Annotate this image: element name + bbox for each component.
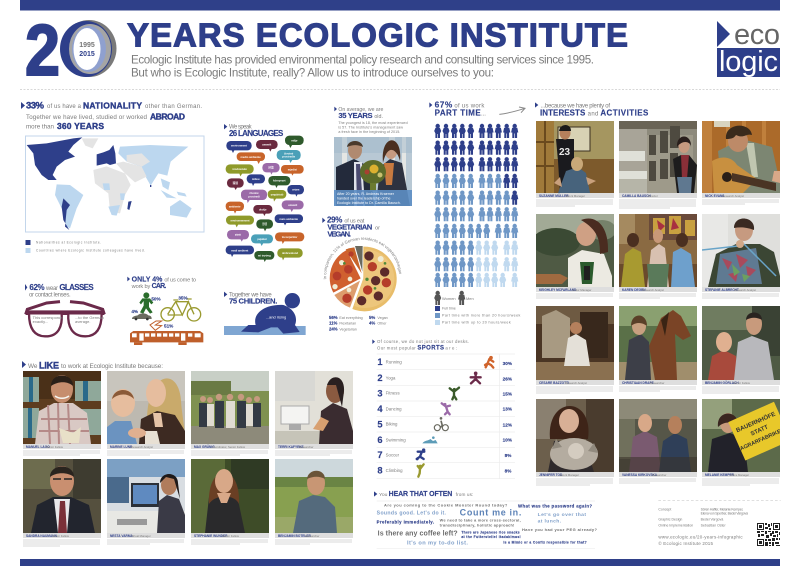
panel: sports ranking: SPORTS [417, 346, 444, 352]
panel: sports ranking: 8% [505, 453, 512, 458]
photo card: Benjamin Görlach: BENJAMIN GÖRLACH [705, 380, 739, 385]
photo card: Sandra: Senior Fellow [52, 534, 70, 538]
panel: 26 languages speech bubbles: pejabat [257, 237, 267, 241]
panel: sports ranking: Of course, we do not just sit at our desks. [377, 339, 469, 344]
photo card: row three middle, horse: CHRISTIAAN DRAPE [622, 381, 654, 385]
photo card: Camilla Bausch: Director [648, 194, 658, 198]
pictogram legend [434, 291, 521, 325]
panel: quotes we hear often: Preferably immediately. [377, 520, 434, 525]
panel: sports ranking: 8% [505, 469, 512, 474]
pizza chart: In comparison, 11% of German residents eat vegetarian/vegan. [324, 237, 402, 280]
icon: yoga [471, 375, 481, 383]
panel: credits: Elena von Sperber, Bedei Vargová [701, 511, 748, 515]
panel: average age: On average, we are [338, 107, 383, 113]
pictogram legend: Part time with up to 20 hours/week [442, 321, 511, 325]
panel heading: interests and activities: ACTIVITIES [600, 108, 649, 117]
panel: credits: Sebastian Oster [701, 524, 726, 528]
panel: nationality and abroad: more than [26, 124, 55, 130]
panel: 26 languages speech bubbles: medio ambiente [241, 155, 261, 159]
panel: credits: Online Implementation [658, 524, 693, 528]
photo card: family pair [619, 399, 697, 483]
photo: handover with flowers: handed over the leadership of the [337, 196, 391, 200]
pizza legend: Vegetarian [339, 327, 357, 331]
panel: credits: © Ecologic Institute 2015 [658, 540, 713, 546]
icon: dancing [442, 403, 450, 414]
pizza legend: 11% [329, 321, 338, 326]
panel: 26 languages speech bubbles: umwelt [288, 203, 297, 207]
photo card: Karen Degen [619, 214, 697, 298]
pizza legend [329, 315, 388, 331]
photo card: Karen Degen: KAREN DEGEN [622, 288, 646, 292]
photo card: row three left [536, 306, 614, 393]
panel: part time [429, 100, 525, 118]
anniversary logo: 20 with 1995-2015: 1995 [79, 42, 95, 49]
panel: 26 languages speech bubbles: 环境 [268, 166, 274, 170]
photo card: Melanie with protest sign: STATT [750, 425, 770, 438]
panel: 75 children: ...and rising [266, 315, 286, 320]
photo card: Camilla Bausch: CAMILLA BAUSCH [622, 194, 651, 198]
pictogram legend: Part time with more than 20 hours/week [442, 314, 521, 318]
photo card: Stefanie Albrecht [702, 214, 780, 298]
photo card: Stefanie Albrecht: Research Analyst [734, 288, 756, 292]
panel: nationality and abroad: 360 YEARS [57, 121, 104, 131]
icon: swimming [422, 439, 438, 443]
photo card: Stefanie Albrecht: STEFANIE ALBRECHT [705, 288, 739, 292]
panel: commute to work: CAR. [152, 283, 166, 290]
ecologic logo: logic [719, 46, 778, 78]
panel: average age: The youngest is 18, the most experienced [338, 121, 408, 125]
panel: commute to work: 4% [131, 309, 139, 314]
title: YEARS ECOLOGIC INSTITUTE [127, 16, 628, 54]
photo card: Benjamin Boteler [275, 459, 353, 544]
panel: commute to work [127, 276, 203, 345]
photo card: Marine [107, 371, 185, 455]
pizza legend: 24% [329, 326, 338, 331]
photo card: Stephanie Wunder: Senior Fellow [222, 534, 240, 538]
icon: fitness [450, 388, 459, 399]
pizza legend: Other [377, 322, 387, 326]
panel: 26 languages speech bubbles: ಪರಿಸರ [235, 234, 242, 237]
photo card: woman with cat: JENNIFER TOD [539, 473, 563, 477]
panel: sports ranking: Our most popular [377, 346, 416, 351]
photo card: Benjamin Boteler: Researcher [305, 534, 320, 538]
photo card: Stephanie Wunder [191, 459, 269, 544]
panel: average age: is 57. The Institute's management saw [338, 125, 403, 129]
photo card: Keighley McFarland [532, 214, 616, 298]
panel: 26 languages speech bubbles: milieu [252, 177, 260, 181]
panel: quotes we hear often: Let's go over that [538, 512, 586, 518]
bottom banner [20, 559, 780, 566]
photo card: Suzanne Müller [536, 121, 614, 206]
icon: running [485, 359, 493, 368]
panel: credits: Concept [658, 508, 671, 512]
photo card: Manuel Lago: Senior Fellow [46, 445, 64, 449]
photo card: family pair: VANESSA KIRKOVSKA [622, 473, 658, 477]
photo card: Nick Evans: NICK EVANS [705, 194, 724, 198]
icon: pedestrian [139, 292, 153, 314]
photo card: Max: MAX GRÜNIG [194, 444, 215, 449]
icon: climbing [418, 464, 424, 477]
panel: sports ranking: 15% [503, 392, 513, 397]
panel: sports ranking: 7 [377, 450, 383, 460]
panel: sports ranking: Climbing [386, 468, 403, 473]
panel heading: interests and activities: and [588, 111, 598, 117]
pizza legend: 56% [329, 315, 338, 320]
photo: handover with flowers: Ecologic Institute to Dr. Camilla Bausch. [337, 201, 401, 205]
photo card: family pair: Researcher [652, 473, 667, 477]
ecologic logo: eco [734, 19, 780, 51]
world map [26, 136, 204, 232]
panel: 26 languages speech bubbles: environnement [230, 218, 250, 222]
intro text: But who is Ecologic Institute, really? Allow us to introduce ourselves to you: [131, 66, 494, 80]
panel heading: interests and activities [535, 102, 649, 117]
panel: sports ranking: 30% [503, 361, 513, 366]
panel: quotes we hear often: transdisciplinary, holistic approach! [440, 524, 514, 528]
panel: commute to work: 50% [151, 296, 162, 301]
photo card: Suzanne Müller: SUZANNE MÜLLER [539, 193, 569, 198]
photo card: Marine: MARINE LUNE [110, 445, 132, 449]
panel: sports ranking: 1 [377, 357, 383, 367]
photo card: Suzanne Müller: 23 [559, 147, 571, 158]
panel: quotes we hear often: You [379, 492, 388, 498]
photo card: row three left: Research Analyst [565, 381, 587, 385]
panel: 75 children: 75 CHILDREN. [229, 296, 277, 305]
panel: part time: of us work [454, 103, 484, 109]
panel: glasses: or contact lenses. [29, 293, 71, 299]
panel: 26 languages speech bubbles: ympäristö [271, 192, 284, 196]
map legend: Countries where Ecologic Institute colleagues have lived. [36, 248, 145, 252]
photo card: Terri: Researcher [299, 445, 314, 449]
intro text: Ecologic Institute has provided environmental policy research and consulting services since 1995. [131, 54, 594, 66]
panel: glasses: GLASSES [59, 283, 94, 292]
panel: part time: ... [481, 112, 486, 118]
photo card: Sandra: SANDRA NAUMANN [26, 534, 58, 538]
panel: nationality and abroad: Together we have lived, studied or worked [26, 114, 148, 121]
photo card: Marine: Research Analyst [131, 445, 153, 449]
photo card: Nick Evans: Research Analyst [722, 194, 744, 198]
panel: quotes we hear often: There are Japanese rice snacks [461, 530, 520, 534]
photo card: woman with cat: Event Manager [560, 473, 579, 477]
panel: 26 languages speech bubbles: 26 LANGUAGES [229, 129, 284, 138]
photo card: Max: Coordinator, Senior Fellow [212, 445, 246, 449]
panel: 26 languages speech bubbles [224, 124, 304, 262]
panel: sports ranking: 4 [377, 404, 383, 414]
panel: commute to work: 51% [164, 324, 174, 329]
ecologic logo [717, 19, 780, 78]
photo card: row three left: CESARE BAZZOTTI [539, 381, 569, 385]
photo card: Melanie with protest sign [702, 399, 791, 485]
panel: 26 languages speech bubbles: We speak [229, 125, 252, 131]
panel: commute to work: work by [131, 284, 151, 290]
icon: soccer [417, 452, 424, 459]
panel: sports ranking: 12% [503, 423, 513, 428]
panel: 26 languages speech bubbles: ortam [292, 188, 300, 192]
panel: sports ranking: Yoga [386, 375, 396, 380]
pizza chart [324, 237, 402, 312]
panel: 26 languages speech bubbles: umwelt [262, 143, 271, 147]
panel: 26 languages speech bubbles: mi trường [258, 254, 271, 258]
panel: nationality and abroad: other than German. [145, 104, 202, 110]
panel: 26 languages speech bubbles: životné [249, 191, 259, 195]
photo card: Camilla Bausch [619, 121, 697, 208]
panel: quotes we hear often: HEAR THAT OFTEN [389, 491, 452, 498]
panel: vegetarian or vegan [322, 216, 380, 239]
panel: part time: PART TIME [435, 109, 481, 118]
panel: vegetarian or vegan: or [375, 225, 380, 231]
panel: sports ranking: Dancing [386, 406, 402, 411]
photo card: Sandra [23, 459, 101, 546]
pictogram legend: Men [466, 296, 474, 301]
photo card: Karen Degen: Research Analyst [642, 288, 664, 292]
panel: sports ranking: Fitness [386, 391, 400, 396]
panel: 26 languages speech bubbles: meio ambiente [279, 217, 298, 221]
panel heading: interests and activities: ...because we have plenty of [541, 103, 610, 109]
panel: glasses: This corresponds [33, 315, 63, 320]
panel: quotes we hear often: Sounds good. Let's do it. [377, 511, 447, 517]
icon: biking [434, 425, 448, 431]
panel: commute to work: 35% [178, 295, 189, 300]
panel: glasses: 62% [29, 283, 45, 292]
panel: sports ranking: 13% [503, 407, 513, 412]
panel: 26 languages speech bubbles: ambiente [229, 204, 241, 208]
panel: quotes we hear often: Is a Mimic or a Confix responsible for that? [503, 541, 587, 545]
photo card: Max [191, 371, 269, 455]
panel: vegetarian or vegan: of us eat [344, 219, 365, 225]
panel: quotes we hear often: from us: [456, 492, 473, 497]
panel: nationality and abroad: of us have a [47, 104, 82, 110]
photo card: Nesta [107, 459, 185, 544]
panel: sports ranking: 5 [377, 419, 383, 429]
photo card: row three middle, horse [619, 306, 697, 391]
photo card: Suzanne Müller: Event Manager [566, 194, 585, 198]
panel: glasses: ...to the German [75, 315, 104, 320]
panel: sports ranking: Running [386, 359, 402, 364]
photo card: Stephanie Wunder: STEPHANIE WUNDER [194, 534, 228, 538]
pizza legend: 4% [369, 321, 375, 326]
panel: quotes we hear often: We need to take a more cross-sectoral, [440, 519, 521, 523]
pictogram chart: staff by hours [434, 124, 518, 287]
panel: sports ranking: Soccer [386, 452, 400, 457]
panel: average age: a fresh face in the beginning of 2015. [338, 130, 400, 134]
panel: sports ranking: 2 [377, 373, 383, 383]
panel: glasses: exactly... [33, 319, 48, 324]
panel: 26 languages speech bubbles: înconjurător [281, 235, 297, 239]
photo: handover with flowers: After 20 years, R. Andreas Kraemer [337, 192, 395, 196]
panel: credits: Graphic Design [658, 518, 682, 522]
panel: nationality and abroad: 33% [26, 100, 45, 112]
photo card: Nick Evans [702, 121, 780, 204]
panel: commute to work: ONLY 4% [132, 276, 163, 283]
panel: credits: www.ecologic.eu/20-years-infographic [658, 534, 743, 539]
photo card: Keighley McFarland: Junior Manager [572, 288, 592, 292]
panel: quotes we hear often [374, 491, 598, 548]
panel: vegetarian or vegan: VEGAN. [327, 230, 351, 239]
panel: quotes we hear often: Are you coming to the Cookie Monster Round today? [384, 503, 508, 508]
panel heading: we like: to work at Ecologic Institute because: [61, 363, 163, 370]
panel: nationality and abroad: NATIONALITY [83, 100, 142, 110]
panel heading: interests and activities: INTERESTS [540, 108, 586, 117]
panel: 26 languages speech bubbles: životné [284, 151, 294, 155]
panel: sports ranking: 3 [377, 388, 383, 398]
icon: car [132, 313, 152, 319]
panel: credits: Bedei Vargová [701, 518, 723, 522]
photo card: row three middle, horse: Researcher [650, 381, 665, 385]
panel: quotes we hear often: at lunch. [538, 519, 562, 525]
panel: 26 languages speech bubbles: medi ambient [231, 248, 248, 252]
intro text [131, 54, 594, 80]
photo card: Benjamin Boteler: BENJAMIN BOTELER [278, 534, 311, 538]
arrow [499, 107, 525, 114]
panel: part time: 67% [435, 100, 453, 110]
panel: 26 languages speech bubbles: environment [231, 144, 247, 148]
panel: quotes we hear often: What was the password again? [518, 503, 592, 508]
photo card: Melanie with protest sign: Office Manager [730, 473, 749, 477]
panel heading: we like: LIKE [39, 360, 59, 370]
photo card: Nesta: Virtual Manager [131, 534, 151, 538]
photo card: Melanie with protest sign: MELANIE KEMPER [705, 473, 735, 477]
panel: quotes we hear often: Is there any coffee left? [378, 531, 458, 538]
panel: sports ranking: Biking [386, 422, 398, 427]
icon: tram [130, 331, 203, 345]
panel: 26 languages speech bubbles: ümbruskond [282, 251, 298, 255]
photo card: Nesta: NESTA VARMA [110, 534, 133, 538]
panel: 26 languages speech bubbles: okolje [259, 207, 267, 211]
panel: sports ranking: 26% [503, 376, 513, 381]
top banner [20, 0, 780, 10]
panel: 26 languages speech bubbles: 환경 [262, 222, 268, 226]
panel: 26 languages speech bubbles: környezet [273, 179, 286, 183]
pictogram legend: Full time [442, 307, 456, 311]
panel heading: we like [22, 360, 163, 370]
anniversary logo: 20 with 1995-2015 [25, 11, 116, 91]
anniversary logo: 20 with 1995-2015: 2015 [79, 51, 95, 58]
panel: nationality and abroad [21, 100, 202, 131]
panel: 26 languages speech bubbles: prostredie [282, 155, 296, 159]
QR code [757, 523, 780, 546]
panel: 26 languages speech bubbles: prostredí [248, 194, 260, 198]
panel: average age: 35 YEARS [338, 111, 373, 120]
panel: glasses: wear [45, 286, 58, 292]
photo card: Manuel Lago: MANUEL LAGO [26, 445, 50, 449]
panel: sports ranking: 8 [377, 466, 383, 476]
icon: bicycle [161, 299, 201, 321]
map legend [26, 240, 145, 253]
panel: average age: old. [374, 114, 383, 120]
panel: sports ranking: are: [445, 346, 457, 351]
photo card: Benjamin Görlach: Senior Fellow [733, 381, 751, 385]
pizza legend: Eat everything [339, 316, 363, 320]
panel: commute to work: of us come to [164, 277, 196, 283]
panel: sports ranking: 6 [377, 435, 383, 445]
photo card: Melanie with protest sign: BAUERNHÖFE [735, 411, 777, 434]
pizza legend: Flexitarian [339, 322, 356, 326]
panel: 75 children [224, 292, 306, 335]
panel: quotes we hear often: at the Futterstelle! Itadakimas! [461, 535, 521, 539]
panel: glasses: average. [75, 319, 91, 324]
photo card: woman with cat [536, 399, 614, 485]
panel: 26 languages speech bubbles: mjedisi [288, 168, 297, 172]
panel: nationality and abroad: ABROAD [150, 112, 185, 122]
panel: credits [658, 501, 781, 546]
panel: glasses [25, 283, 104, 336]
anniversary logo: 20 with 1995-2015: 2 [25, 11, 60, 91]
panel: quotes we hear often: Count me in. [460, 508, 521, 518]
photo card: Melanie with protest sign: AGRARFABRIKEN! [739, 426, 788, 452]
panel: sports ranking: 10% [503, 438, 513, 443]
panel: vegetarian or vegan: VEGETARIAN [327, 222, 373, 231]
panel: 26 languages speech bubbles: miljø [291, 138, 298, 142]
panel: vegetarian or vegan: 29% [327, 216, 342, 225]
photo: handover with flowers [334, 137, 412, 206]
photo card: Keighley McFarland: KEIGHLEY MCFARLAND [539, 288, 577, 292]
photo card: Terri: TERRI KAFYEKE [278, 445, 304, 449]
panel: 26 languages speech bubbles: środowisko [232, 167, 247, 171]
panel: 75 children: Together we have [229, 292, 272, 298]
panel: 26 languages speech bubbles: 環境 [233, 181, 238, 185]
panel: quotes we hear often: Have you had your PEG already? [522, 527, 598, 532]
panel: average age [334, 107, 408, 134]
pizza legend: Vegan [377, 316, 388, 320]
pizza legend: 5% [369, 315, 375, 320]
panel: sports ranking [372, 339, 515, 479]
photo card: Terri [275, 371, 353, 455]
map legend: Nationalities at Ecologic Institute. [36, 240, 101, 244]
photo card: Benjamin Görlach [702, 306, 780, 393]
panel: credits: Sören Haffer, Melanie Kemper, [701, 508, 744, 512]
pictogram legend: Women [442, 296, 456, 301]
panel: quotes we hear often: It's on my to-do list. [407, 541, 468, 547]
panel: sports ranking: Swimming [386, 437, 406, 442]
panel heading: we like: We [28, 363, 38, 370]
photo card: Manuel Lago [23, 371, 101, 455]
